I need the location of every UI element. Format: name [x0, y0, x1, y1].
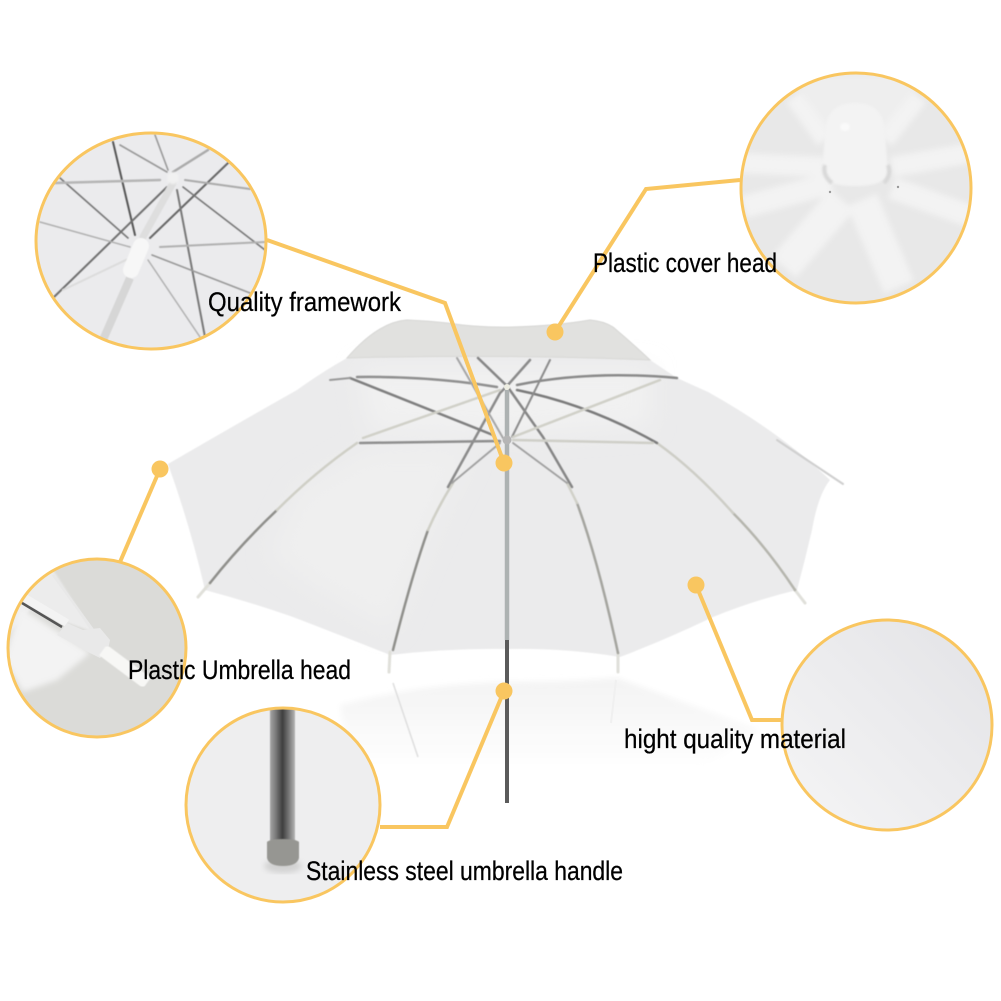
- canopy edge rods: [198, 440, 843, 672]
- umbrella canopy: [168, 320, 830, 657]
- knob: [824, 136, 886, 185]
- label: quality framework: Quality framework: [208, 287, 401, 317]
- dot: umbrella head: [152, 460, 168, 478]
- dot: material: [688, 576, 704, 594]
- panel: quality framework detail: [30, 125, 275, 355]
- label: stainless steel umbrella handle: Stainless steel umbrella handle: [306, 856, 623, 886]
- connector: plastic umbrella head: [120, 469, 160, 562]
- panel: material detail: [782, 620, 992, 830]
- dot: cover head: [546, 324, 564, 340]
- panel: handle detail: [183, 705, 383, 905]
- circle border: [36, 133, 266, 349]
- label: hight quality material: hight quality material: [624, 724, 846, 754]
- frame ribs: [210, 358, 795, 653]
- center lighter canopy panels: [270, 368, 650, 630]
- upper hub: [504, 384, 510, 390]
- circle border: [741, 73, 971, 303]
- connector: quality framework: [267, 240, 504, 463]
- connector: handle: [380, 691, 504, 827]
- circle border: [8, 559, 186, 737]
- connector: material: [696, 585, 783, 720]
- top canopy panel: [347, 320, 650, 360]
- umbrella: [168, 320, 843, 803]
- circle border: [782, 620, 992, 830]
- dot: handle: [496, 682, 512, 700]
- panel: plastic umbrella head detail: [4, 555, 190, 741]
- label: plastic umbrella head: Plastic Umbrella head: [128, 655, 351, 685]
- lower hub: [502, 436, 512, 444]
- dot: framework: [496, 454, 512, 472]
- connector: plastic cover head: [555, 180, 740, 332]
- circle border: [186, 708, 380, 902]
- panel: plastic cover head detail: [735, 68, 975, 308]
- label: plastic cover head: Plastic cover head: [593, 248, 777, 278]
- umbrella shaft: [505, 390, 509, 803]
- reflection under umbrella: [340, 678, 760, 770]
